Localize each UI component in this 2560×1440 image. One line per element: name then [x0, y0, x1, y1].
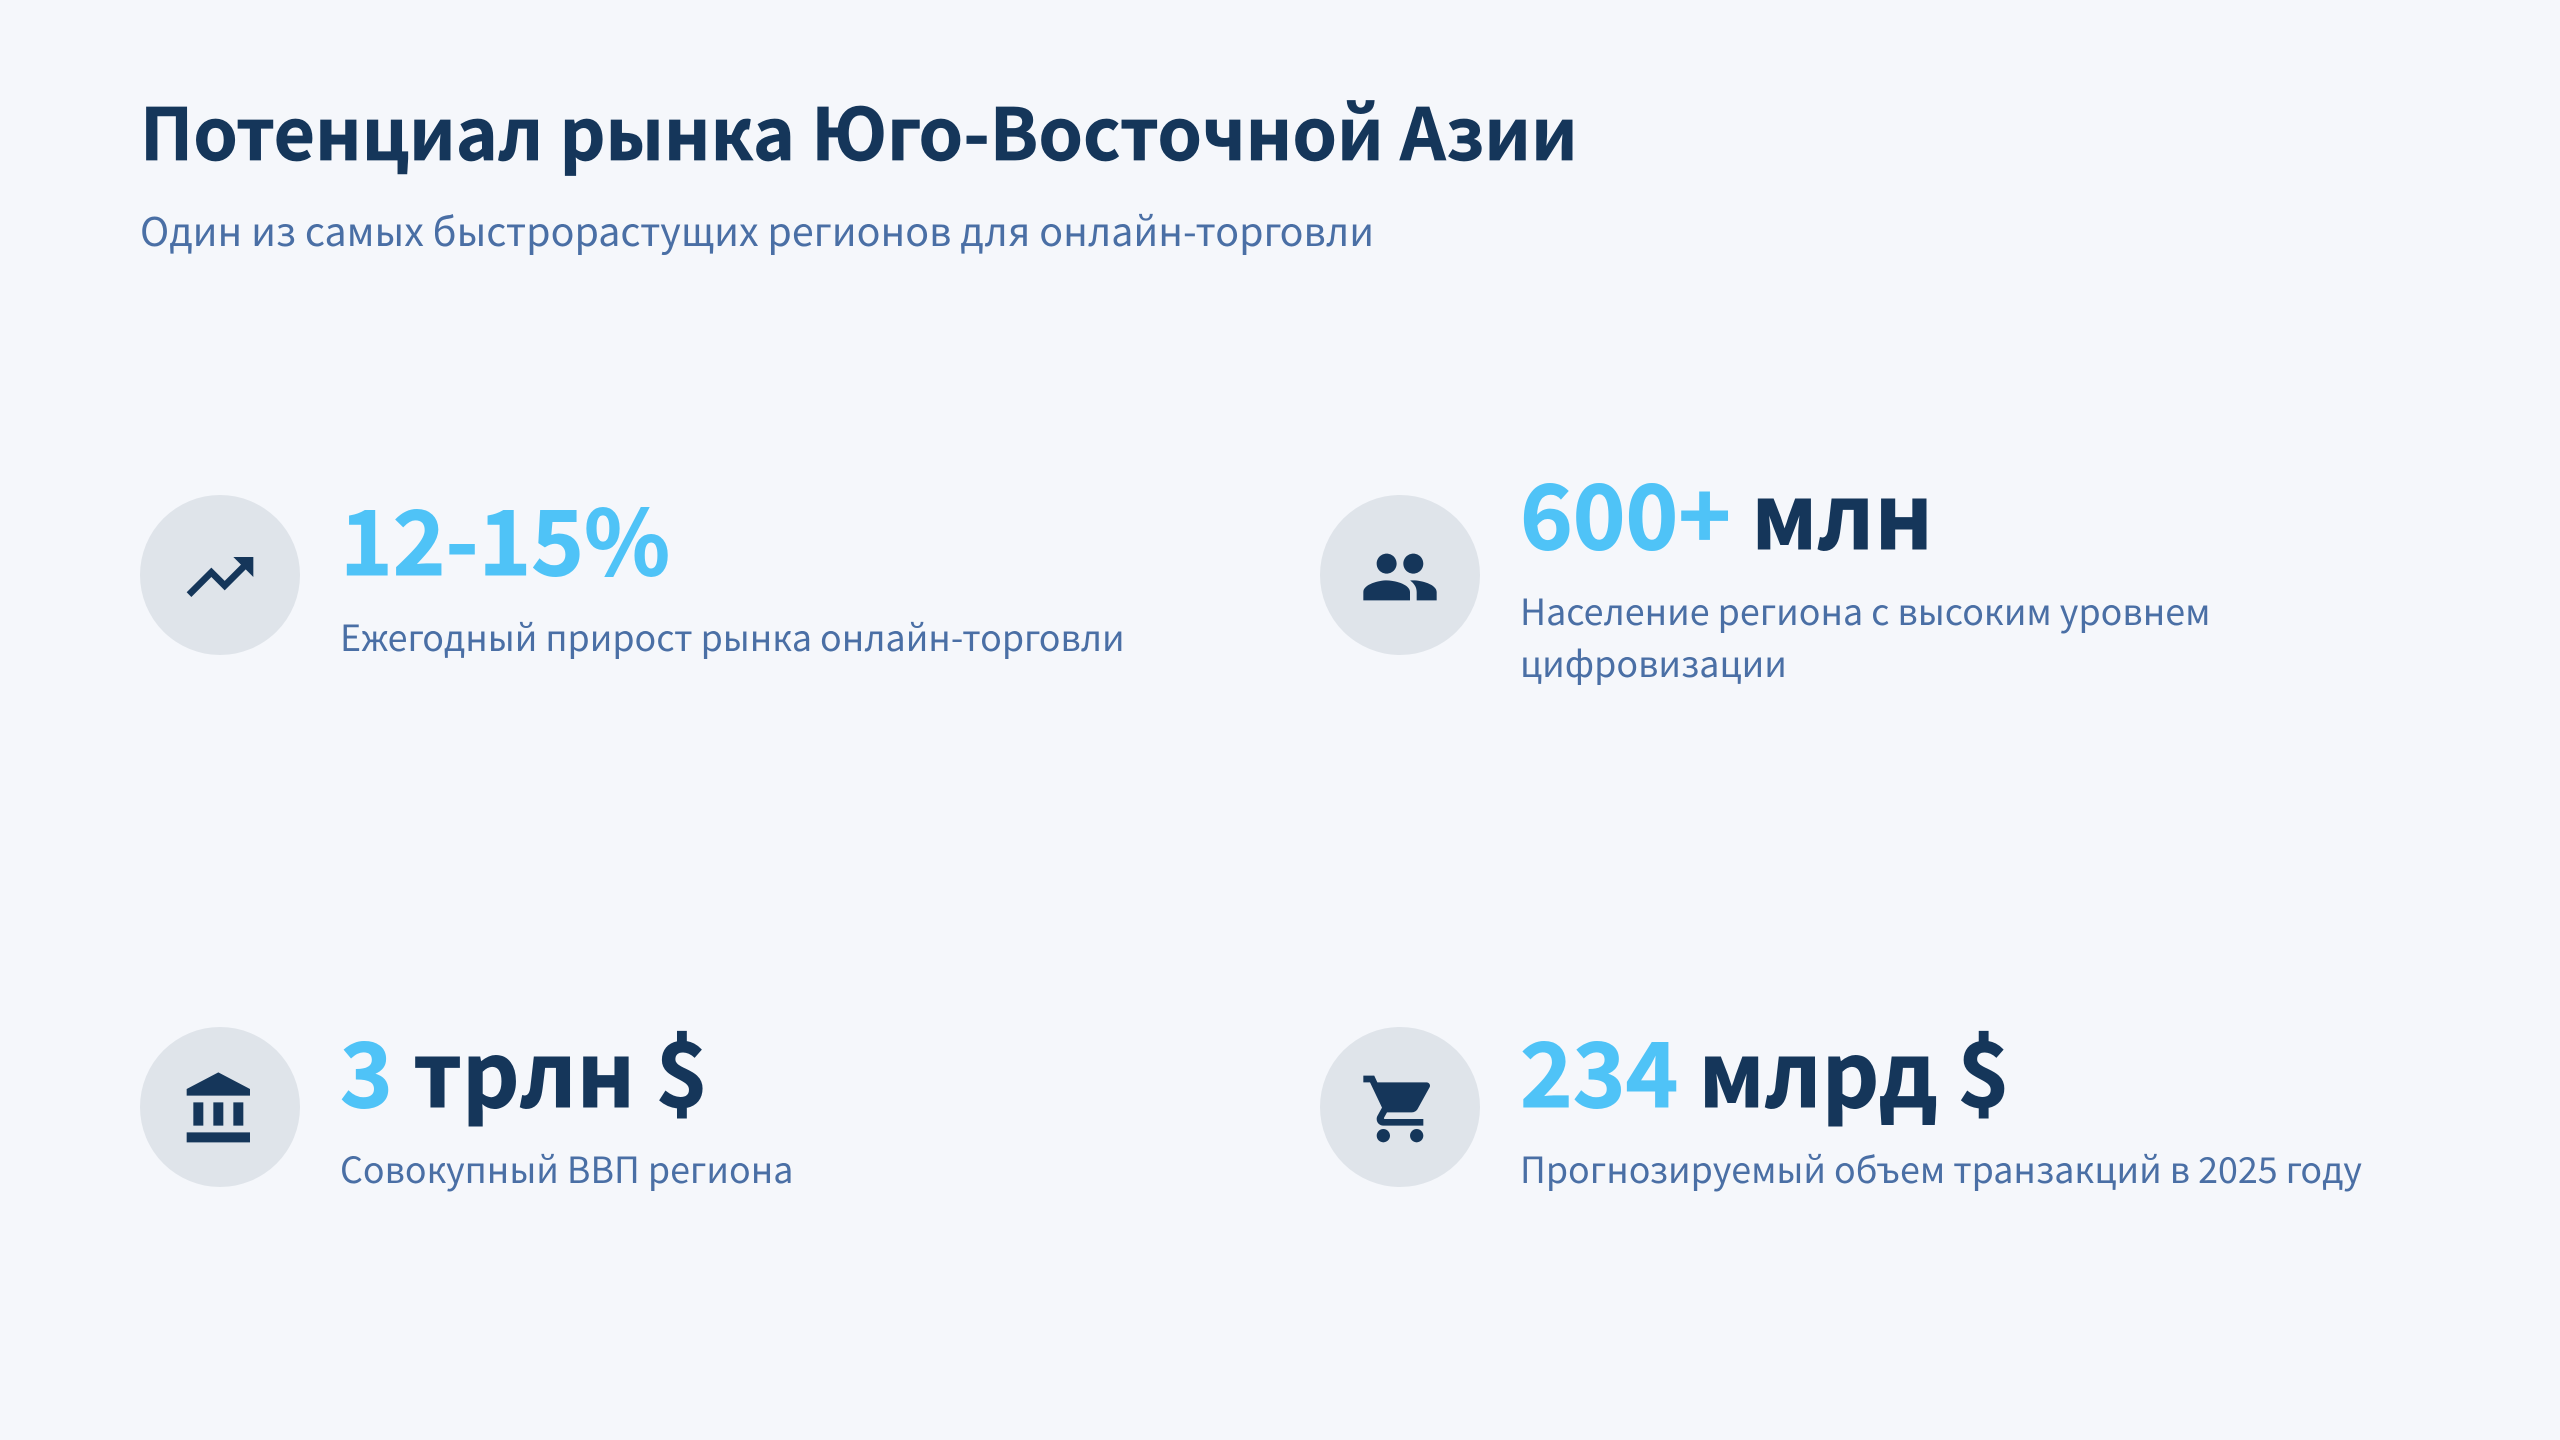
stat: population description: цифровизации: [1520, 636, 1787, 688]
stat: annual growth description: Ежегодный прирост рынка онлайн-торговли: [340, 610, 1125, 662]
stat: GDP value: 3 трлн $: [340, 1003, 708, 1133]
stat: population description: [1520, 584, 2210, 688]
icon: shopping cart: [1320, 1027, 1480, 1187]
icon: bank: [140, 1027, 300, 1187]
title: Потенциал рынка Юго-Восточной Азии: [140, 77, 1578, 181]
stat: transactions description: Прогнозируемый объем транзакций в 2025 году: [1520, 1142, 2362, 1194]
stat: GDP description: Совокупный ВВП региона: [340, 1142, 793, 1194]
stat: population value: 600+ млн: [1520, 445, 1933, 575]
subtitle: Один из самых быстрорастущих регионов для онлайн-торговли: [140, 201, 1374, 258]
icon: people: [1320, 495, 1480, 655]
stat: annual growth value: 12-15%: [340, 471, 670, 601]
icon: trending up: [140, 495, 300, 655]
stat: population description: Население региона с высоким уровнем: [1520, 584, 2210, 636]
stat: transactions value: 234 млрд $: [1520, 1003, 2010, 1133]
